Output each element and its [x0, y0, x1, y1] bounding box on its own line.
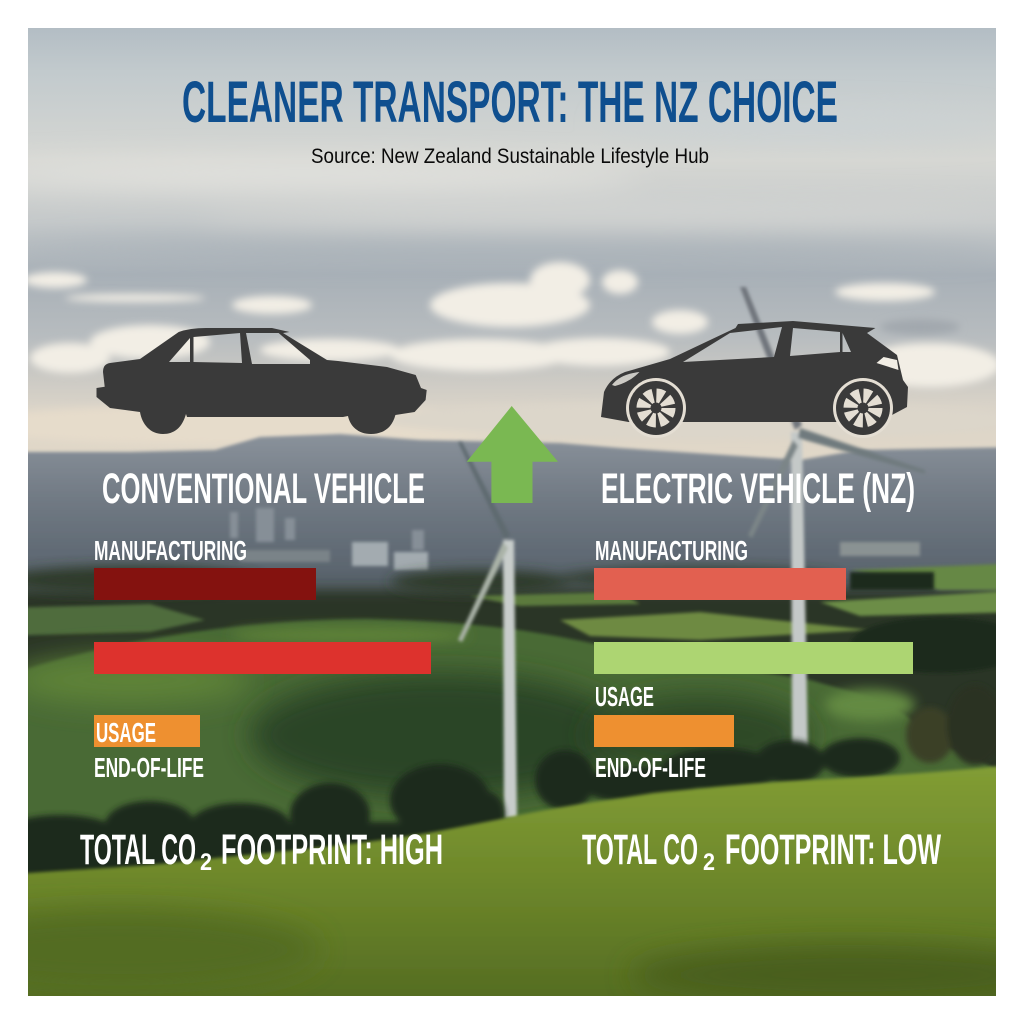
clouds: [28, 166, 996, 436]
foreground slope: [28, 764, 996, 996]
panel: conventional vehicle bars: [94, 535, 431, 783]
total footprint: high: 2: [200, 849, 212, 876]
sky: [28, 28, 996, 468]
rear wheel: [833, 378, 893, 438]
icon: conventional car: [96, 328, 427, 434]
arrow: upward green: [467, 406, 558, 503]
distant mountains and city haze: [28, 432, 996, 596]
rolling green hill: [28, 618, 994, 825]
bar: end-of-life: [594, 715, 734, 747]
front wheel: [626, 378, 686, 438]
bar: usage: [594, 642, 913, 674]
total footprint: high: [80, 826, 443, 876]
label: end-of-life: END-OF-LIFE: [595, 752, 706, 783]
icon: electric car: [601, 321, 908, 438]
treeline: [28, 707, 986, 875]
dark tree clusters in fields: [848, 570, 996, 673]
wind turbine: centre: [458, 442, 517, 818]
label: end-of-life: END-OF-LIFE: [94, 752, 204, 783]
total footprint: high: FOOTPRINT: HIGH: [221, 826, 443, 874]
city: [230, 508, 920, 570]
label: manufacturing: MANUFACTURING: [94, 535, 247, 566]
wind turbine: right: [740, 287, 925, 752]
label: usage: USAGE: [96, 717, 156, 748]
bar: manufacturing: [94, 568, 316, 600]
bar: usage: [94, 642, 431, 674]
total footprint: high: TOTAL CO: [80, 826, 196, 874]
total footprint: low: [582, 826, 941, 876]
total footprint: low: 2: [703, 849, 715, 876]
source line: Source: New Zealand Sustainable Lifestyle Hub: [311, 145, 709, 168]
label: usage: USAGE: [595, 681, 654, 712]
total footprint: low: TOTAL CO: [582, 826, 698, 874]
bar: manufacturing: [594, 568, 846, 600]
panel: electric vehicle bars: [594, 535, 913, 783]
label: manufacturing: MANUFACTURING: [595, 535, 748, 566]
mid-distance dark band and fields: [28, 582, 996, 641]
bar: end-of-life: [94, 715, 200, 747]
base ground tone: [949, 740, 996, 769]
heading: conventional vehicle: CONVENTIONAL VEHICLE: [102, 465, 425, 513]
